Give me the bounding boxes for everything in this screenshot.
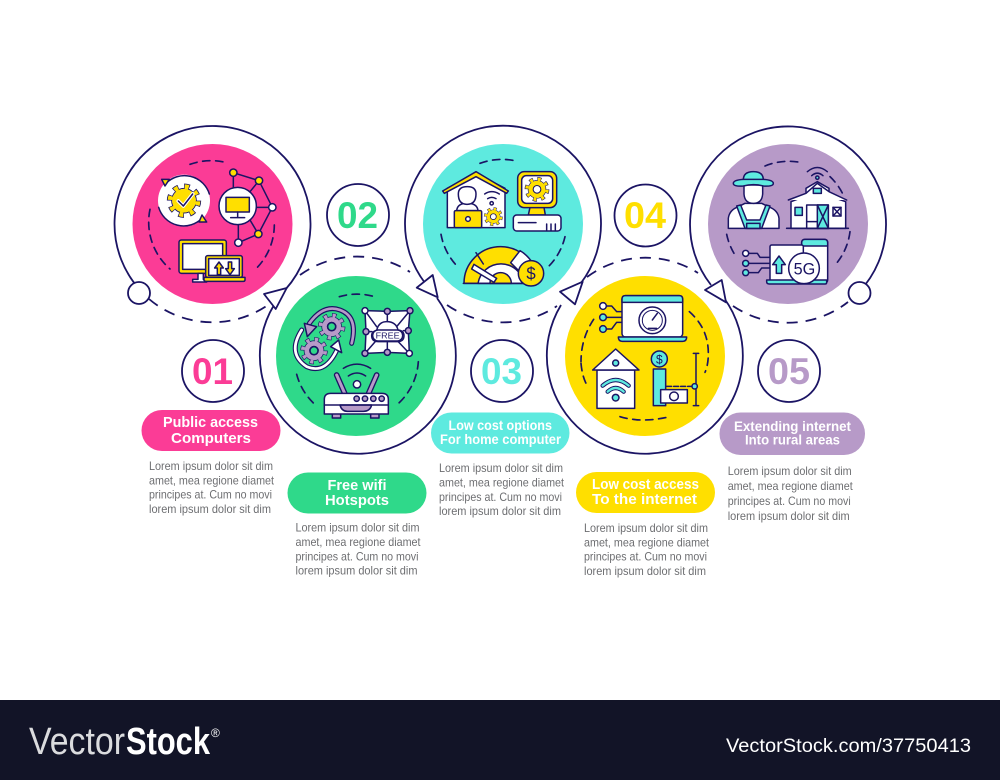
number badge 02: 02 (337, 195, 378, 236)
text block 04: lorem ipsum dolor sit dim (584, 564, 706, 578)
label pill 01 (142, 410, 280, 451)
text block 02: principes at. Cum no movi (296, 549, 418, 563)
label pill 04: Low cost access (592, 476, 699, 493)
marker: start circle (128, 282, 150, 304)
logo: ® (211, 726, 220, 740)
icon: wifi, gears, free hotspot: FREE (376, 331, 400, 341)
label pill 03 (431, 412, 570, 454)
arrow 3 to 4 (560, 282, 583, 304)
text block 04: amet, mea regione diamet (584, 535, 710, 549)
text block 05: lorem ipsum dolor sit dim (728, 509, 850, 523)
text block 03: Lorem ipsum dolor sit dim (439, 461, 563, 475)
text block 03: principes at. Cum no movi (439, 490, 562, 504)
ring: solid arc and dashed arc (115, 126, 311, 322)
icon: home office and cost gauge (441, 159, 565, 286)
logo: Vector (29, 721, 125, 763)
number badge 05: 05 (768, 351, 810, 392)
ring: solid arc and dashed arc (405, 126, 601, 322)
label pill 05 (720, 412, 865, 455)
number badge 02 (327, 184, 389, 246)
icon: home office and cost gauge: $ (526, 264, 536, 284)
logo: Stock (126, 721, 211, 763)
number badge 01: 01 (192, 351, 233, 392)
label pill 02 (288, 472, 426, 514)
number badge 05 (758, 340, 820, 402)
number badge 01 (182, 340, 244, 402)
label pill 04 (576, 472, 715, 513)
label pill 02: Hotspots (325, 492, 389, 509)
text block 01: lorem ipsum dolor sit dim (149, 502, 271, 516)
icon: farmer, barn, 5G device: 5G (794, 259, 815, 278)
text block 02: Lorem ipsum dolor sit dim (296, 520, 420, 534)
arrow 4 to 5 (705, 280, 726, 302)
text block 05: Lorem ipsum dolor sit dim (728, 464, 852, 478)
text block 03: amet, mea regione diamet (439, 476, 565, 490)
circle: pink disc (132, 144, 292, 304)
arrow 1 to 2 (264, 288, 287, 309)
number badge 03 (471, 340, 533, 402)
footer background (0, 700, 1000, 780)
icon: public computers (149, 161, 276, 282)
label pill 03: Low cost options (448, 417, 552, 433)
icon: wifi, gears, free hotspot (295, 294, 418, 418)
number badge 04 (614, 184, 676, 246)
text block 01: principes at. Cum no movi (149, 488, 272, 502)
text block 03: lorem ipsum dolor sit dim (439, 504, 561, 518)
text block 03 (439, 461, 565, 518)
circle: purple disc (708, 144, 868, 304)
label pill 05: Extending internet (734, 418, 851, 434)
panel: 02 free wifi hotspots (260, 184, 456, 578)
panel: 01 public access computers (115, 126, 311, 516)
text block 02: amet, mea regione diamet (296, 535, 421, 549)
ring: solid arc and dashed arc (547, 258, 743, 454)
icon: speed test, home wifi, price (581, 296, 708, 420)
arrow 2 to 3 (417, 275, 438, 297)
label pill 01: Public access (163, 414, 258, 431)
image id: VectorStock.com/37750413 (726, 736, 971, 757)
footer bar (0, 700, 1000, 780)
text block 02 (296, 520, 421, 578)
label pill 02: Free wifi (328, 477, 386, 494)
label pill 03: For home computer (440, 431, 561, 447)
label pill 01: Computers (171, 430, 251, 447)
text block 05: principes at. Cum no movi (728, 494, 851, 508)
text block 01: amet, mea regione diamet (149, 473, 275, 487)
text block 01: Lorem ipsum dolor sit dim (149, 459, 273, 473)
text block 01 (149, 459, 275, 516)
text block 04: Lorem ipsum dolor sit dim (584, 521, 708, 535)
number badge 03: 03 (481, 351, 522, 392)
text block 04: principes at. Cum no movi (584, 550, 707, 564)
arrows between circles (264, 275, 726, 309)
panel: 03 low cost options (405, 126, 601, 518)
circle: cyan disc (423, 144, 583, 304)
text block 05 (728, 464, 853, 523)
ring: solid arc and dashed arc (260, 257, 456, 454)
circle: yellow disc (565, 276, 725, 436)
label pill 05: Into rural areas (745, 432, 840, 448)
marker: end circle (848, 282, 870, 304)
icon: farmer, barn, 5G device (727, 161, 850, 284)
icon: speed test, home wifi, price: $ (656, 353, 663, 367)
label pill 04: To the internet (592, 491, 697, 508)
number badge 04: 04 (624, 195, 666, 236)
circle: green disc (276, 276, 436, 436)
logo (29, 721, 220, 763)
panel: 05 extending internet (690, 126, 886, 523)
panel: 04 low cost access (547, 184, 743, 578)
ring: solid arc and dashed arc (690, 126, 886, 323)
text block 02: lorem ipsum dolor sit dim (296, 564, 418, 578)
text block 04 (584, 521, 710, 578)
text block 05: amet, mea regione diamet (728, 479, 853, 493)
